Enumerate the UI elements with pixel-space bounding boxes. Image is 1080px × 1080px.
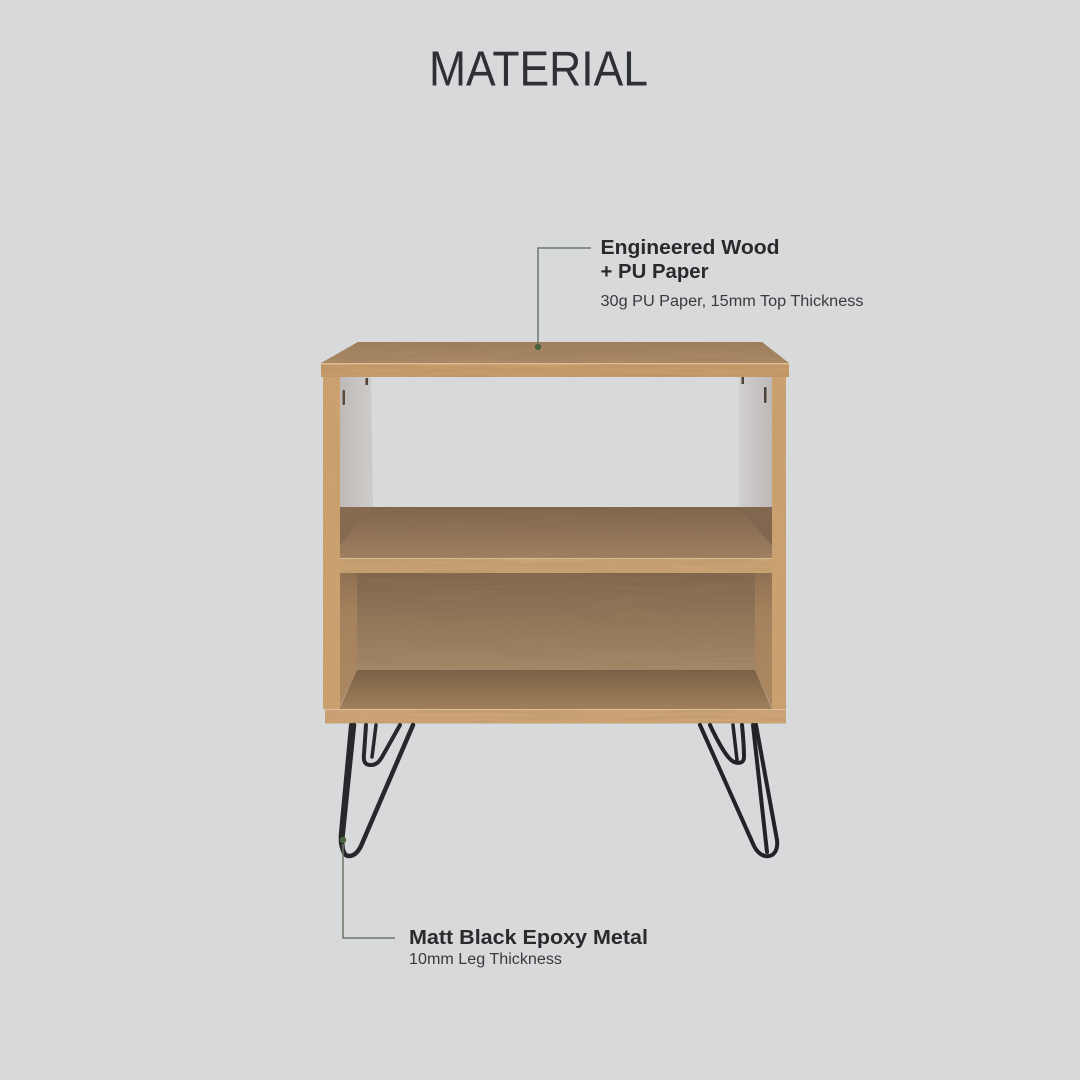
right inner panel [739, 377, 772, 546]
base front edge [325, 709, 786, 724]
lower compartment back panel [357, 573, 755, 670]
callout: metal leader line [340, 837, 395, 938]
middle shelf surface [339, 507, 772, 558]
title: MATERIAL [429, 42, 648, 96]
table top front edge [321, 363, 789, 377]
callout: engineered wood heading: + PU Paper [600, 261, 709, 283]
callout: engineered wood heading: Engineered Wood [600, 237, 780, 259]
lower compartment left side [339, 573, 357, 708]
right hairpin leg [700, 725, 777, 856]
table top surface [321, 342, 789, 363]
side table product illustration [321, 342, 789, 856]
lower compartment right side [755, 573, 772, 708]
right side post [772, 377, 786, 709]
middle shelf front edge [339, 558, 772, 573]
callout: metal heading: Matt Black Epoxy Metal [409, 927, 648, 949]
lower compartment floor [339, 670, 772, 709]
callout: metal detail: 10mm Leg Thickness [409, 951, 562, 968]
infographic canvas [321, 52, 863, 968]
callout: engineered wood leader line [535, 248, 591, 350]
left inner panel [339, 377, 373, 546]
left hairpin leg [341, 725, 413, 856]
callout: engineered wood detail: 30g PU Paper, 15mm Top Thickness [600, 293, 864, 310]
left side post [323, 377, 340, 709]
